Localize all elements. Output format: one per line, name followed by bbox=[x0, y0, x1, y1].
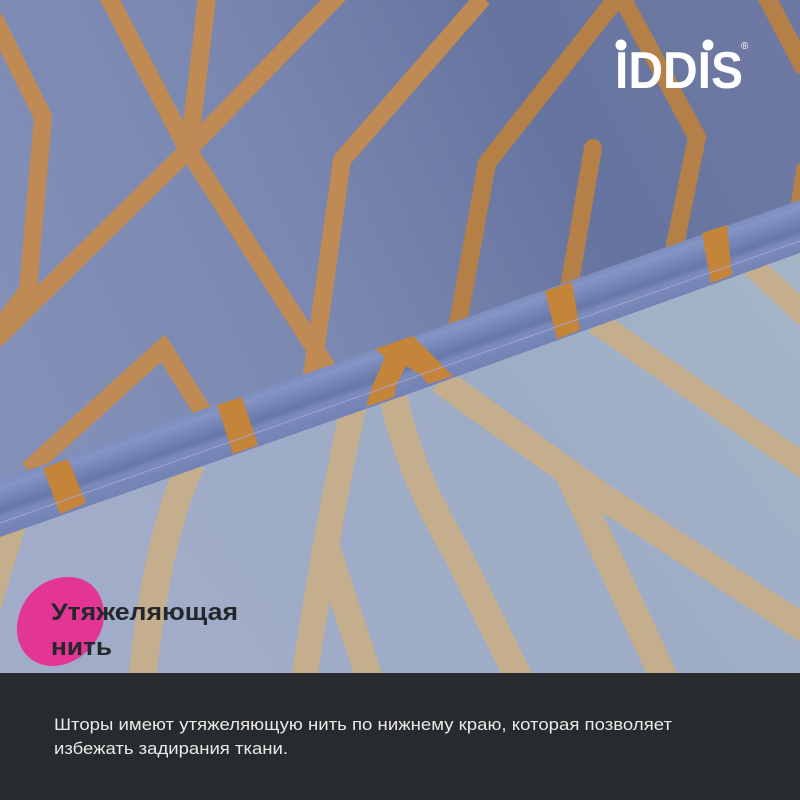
hem stripe 1 bbox=[43, 459, 86, 514]
logo i dot right bbox=[702, 40, 714, 50]
hem chevron stripe bbox=[366, 336, 453, 407]
lower curtain fabric bbox=[0, 245, 800, 673]
hem fabric bbox=[0, 200, 800, 537]
label: weighted thread bbox=[51, 599, 238, 661]
label line 1: Утяжеляющая bbox=[51, 599, 238, 626]
lower curtain faded gold pattern bbox=[0, 263, 800, 680]
caption line 1: Шторы имеют утяжеляющую нить по нижнему краю, которая позволяет bbox=[54, 715, 672, 734]
caption line 2: избежать задирания ткани. bbox=[54, 739, 288, 758]
iDDiS logo bbox=[615, 40, 749, 100]
hem stripe 4 bbox=[545, 282, 580, 339]
weighted hem band bbox=[0, 200, 800, 537]
upper curtain fabric bbox=[0, 0, 800, 500]
logo registered mark: ® bbox=[741, 41, 749, 52]
hem stitch line bbox=[0, 241, 800, 523]
upper curtain geometric gold pattern bbox=[0, 0, 800, 470]
pink blob accent bbox=[17, 577, 104, 666]
logo i dot left bbox=[616, 40, 626, 50]
label line 2: нить bbox=[51, 634, 112, 661]
hem stripe 2 bbox=[217, 397, 258, 454]
hem stripe 5 bbox=[702, 225, 732, 283]
logo wordmark: IDDIS bbox=[615, 42, 743, 100]
caption text bbox=[54, 715, 672, 758]
bottom dark caption bar bbox=[0, 673, 800, 800]
